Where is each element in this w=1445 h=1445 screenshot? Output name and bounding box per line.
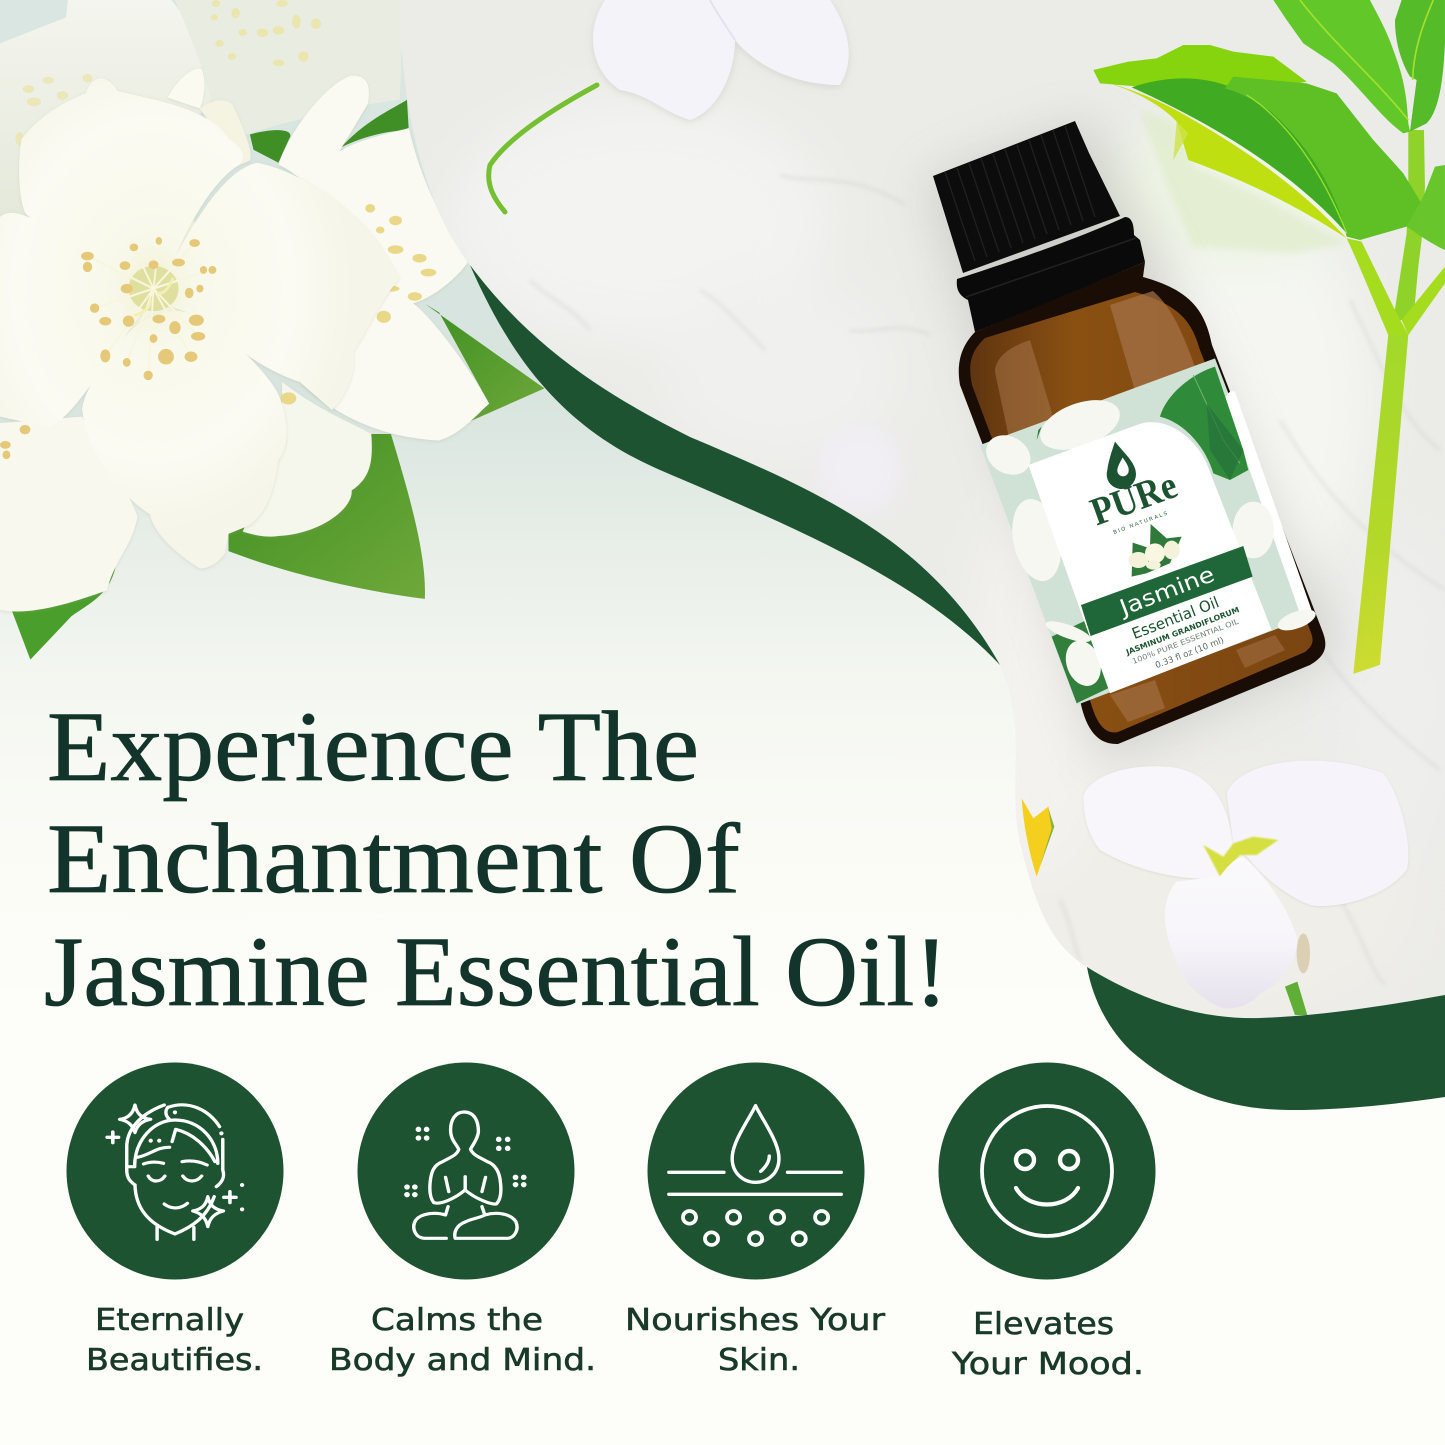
label white panel [1028, 422, 1272, 693]
cap lower ring [957, 217, 1145, 332]
small jasmine sprig [1128, 524, 1182, 577]
benefit captions [86, 1303, 1144, 1382]
label text: Essential Oil [1129, 593, 1222, 643]
leaf halo [1140, 110, 1347, 253]
icon: oil drop on skin [648, 1062, 864, 1280]
caption: Eternally Beautifies: Eternally [95, 1303, 244, 1338]
green branch with leaves [1093, 0, 1445, 674]
top right leaf [1395, 0, 1445, 132]
bottom marble flower and yellow bud [1022, 761, 1408, 1015]
back flower top [175, 0, 403, 135]
label [979, 358, 1318, 705]
curved green swoosh upper [470, 265, 1000, 665]
leaves [11, 100, 544, 660]
marble light patches [490, 136, 1353, 552]
marble cracks [530, 175, 1445, 985]
caption: Elevates Your Mood: Your Mood. [951, 1347, 1144, 1382]
right flower stamens [281, 204, 436, 404]
title [44, 691, 948, 1027]
back petals top left [0, 0, 211, 226]
flower stem [489, 85, 597, 212]
bottle glass [959, 262, 1325, 744]
icon: face with sparkles [66, 1062, 284, 1280]
label right white strip [1225, 391, 1313, 618]
label logo text: BIO NATURALS [1113, 510, 1170, 536]
icon: meditation [358, 1062, 574, 1280]
caption: Calms the Body and Mind: Body and Mind. [329, 1343, 596, 1378]
main flower stamens [0, 237, 216, 459]
panel: marble background [380, 0, 1445, 1040]
label text: 100% PURE ESSENTIAL OIL [1131, 616, 1241, 666]
caption: Calms the Body and Mind [329, 1303, 596, 1378]
label leaf [1160, 367, 1248, 480]
label green band [1081, 546, 1253, 636]
stem [1353, 335, 1408, 674]
caption: Elevates Your Mood [951, 1307, 1144, 1382]
label text [1114, 562, 1241, 671]
leaf lime underside [1097, 80, 1347, 238]
side leaf [1407, 165, 1445, 250]
caption: Eternally Beautifies: Beautifies. [86, 1343, 263, 1378]
curved green swoosh lower [1087, 967, 1445, 1110]
label logo drop [1107, 442, 1136, 489]
title: Enchantment Of [47, 803, 741, 914]
leaf back [1093, 45, 1306, 86]
cap ridges [945, 126, 1095, 261]
title: Experience The [47, 691, 699, 802]
caption: Nourishes Your Skin: Skin. [718, 1343, 800, 1378]
leaf right half [1225, 77, 1422, 240]
caption: Calms the Body and Mind: Calms the [371, 1303, 543, 1338]
back flower stamens [211, 0, 321, 66]
caption: Eternally Beautifies [86, 1303, 263, 1378]
leaf mid dark [1132, 78, 1347, 233]
bottle highlights [995, 340, 1060, 452]
product: essential oil bottle [933, 121, 1325, 744]
top marble flower [593, 0, 849, 120]
title: Jasmine Essential Oil! [44, 916, 948, 1027]
caption: Elevates Your Mood: Elevates [973, 1307, 1114, 1342]
label text: Jasmine [1114, 562, 1218, 622]
label flowers [979, 390, 1318, 635]
label text: JASMINUM GRANDIFLORUM [1124, 605, 1241, 657]
pale flower smudge [826, 436, 896, 508]
icon: smiley face [938, 1062, 1156, 1280]
label lower left leaf and flower [1043, 617, 1112, 703]
label logo text: PURe [1085, 463, 1183, 534]
cap [933, 121, 1120, 273]
main flower petals [79, 208, 228, 373]
top leaf [1273, 0, 1410, 133]
label background [980, 358, 1313, 705]
bottle shadow [925, 120, 1340, 760]
label text: 0.33 fl oz (10 ml) [1154, 636, 1226, 671]
illustration: jasmine flowers top left [0, 0, 544, 660]
caption: Nourishes Your Skin: Nourishes Your [625, 1303, 886, 1338]
right flower [243, 76, 489, 537]
caption: Nourishes Your Skin [625, 1303, 886, 1378]
